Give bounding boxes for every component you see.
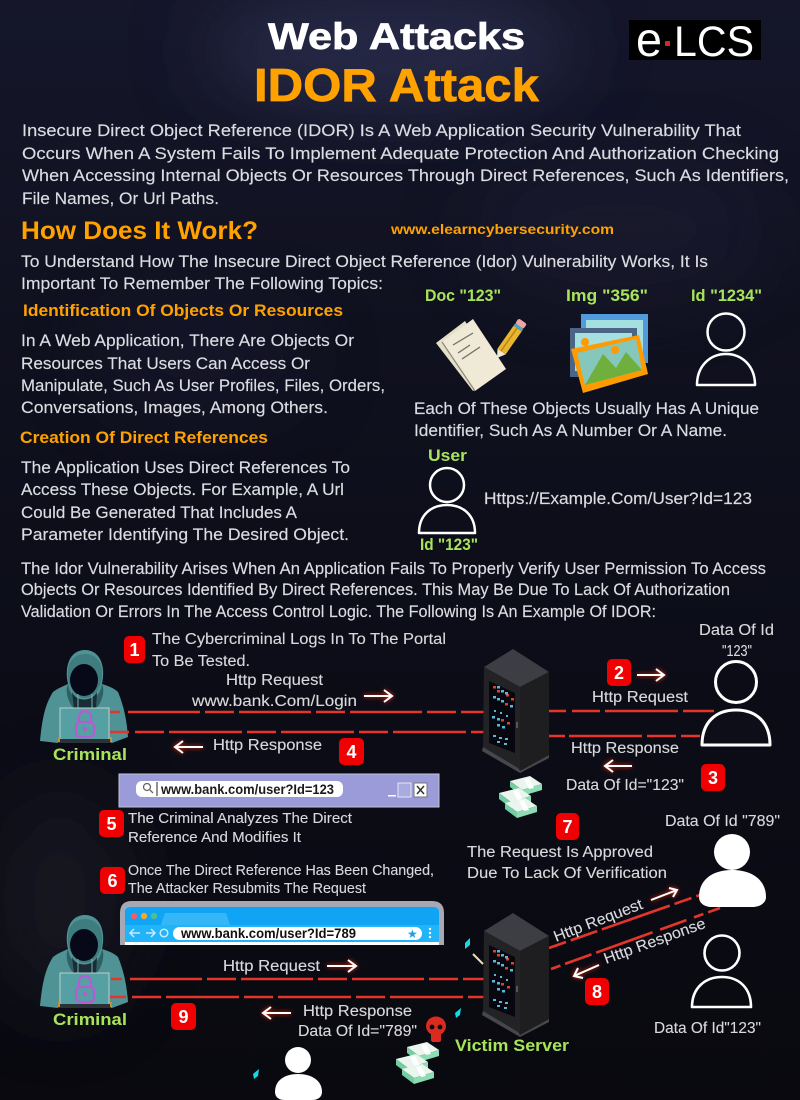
step 9 <box>171 1003 417 1040</box>
diagonal labels and step 8: 8 <box>592 982 602 1002</box>
logo: e-LCS: LCS <box>674 18 754 66</box>
user id 123 top: "123" <box>722 643 752 660</box>
objects description <box>414 399 759 440</box>
creation text: Could Be Generated That Includes A <box>21 503 298 522</box>
step 7: The Request Is Approved <box>467 844 653 861</box>
creation text: The Application Uses Direct References To <box>21 458 350 477</box>
creation text: Parameter Identifying The Desired Object. <box>21 525 349 544</box>
browser bar: modified url <box>119 774 439 807</box>
identification text: Resources That Users Can Access Or <box>21 354 310 373</box>
step 6: 6 <box>107 871 118 891</box>
logo: e-LCS <box>629 14 761 67</box>
server top <box>482 649 549 773</box>
step 3: Http Response <box>571 740 679 757</box>
vulnerability paragraph: Objects Or Resources Identified By Direct References. This May Be Due To Lack Of Authorization <box>21 580 730 599</box>
step 4 response: Http Response <box>213 737 322 754</box>
intro text: Occurs When A System Fails To Implement Adequate Protection And Authorization Checking <box>22 144 779 163</box>
step 6: The Attacker Resubmits The Request <box>128 881 366 897</box>
step 9: 9 <box>178 1007 189 1027</box>
title: Web Attacks <box>268 16 525 57</box>
browser window: changed url: www.bank.com/user?Id=789 <box>180 926 356 941</box>
creation text: Access These Objects. For Example, A Url <box>21 480 344 499</box>
vulnerability paragraph: Validation Or Errors In The Access Control Logic. The Following Is An Example Of IDOR: <box>21 602 656 621</box>
step 1: 1 <box>129 640 140 660</box>
identification text: Manipulate, Such As User Profiles, Files, Orders, <box>21 376 385 395</box>
step 6: Once The Direct Reference Has Been Changed, <box>128 863 434 879</box>
victim server: Victim Server <box>455 1036 569 1055</box>
login request label <box>191 672 392 710</box>
criminal top: Criminal <box>53 745 127 764</box>
intro text: Insecure Direct Object Reference (IDOR) Is A Web Application Security Vulnerability That <box>22 121 741 140</box>
step 1 <box>124 631 446 670</box>
step 7: Due To Lack Of Verification <box>467 865 667 882</box>
heading: creation of direct references: Creation Of Direct References <box>20 428 268 447</box>
browser window: changed url <box>120 901 444 945</box>
user reference icon: User <box>428 446 467 465</box>
how it works intro: Important To Remember The Following Topics: <box>21 274 383 293</box>
object: id user: Id "1234" <box>691 286 762 305</box>
step 3: 3 <box>708 768 718 788</box>
diagonal labels and step 8: Http Request <box>551 896 646 946</box>
user id 789: Data Of Id "789" <box>665 813 780 830</box>
how it works intro: To Understand How The Insecure Direct Object Reference (Idor) Vulnerability Works, It Is <box>21 252 708 271</box>
vulnerability paragraph: The Idor Vulnerability Arises When An Application Fails To Properly Verify User Permission To Access <box>21 559 766 578</box>
step 7: 7 <box>562 817 573 837</box>
second request label <box>223 958 356 975</box>
victim server <box>253 913 569 1079</box>
login request label: Http Request <box>226 672 324 689</box>
creation text <box>21 458 350 544</box>
user reference icon: Id "123" <box>420 535 478 554</box>
dashed connection lines <box>128 711 720 997</box>
user id 123 top: Data Of Id <box>699 622 774 639</box>
diagonal labels and step 8: Http Response <box>602 915 708 968</box>
step 4 response <box>175 737 364 765</box>
object: images: Img "356" <box>566 286 648 305</box>
step 5: The Criminal Analyzes The Direct <box>128 811 352 827</box>
attacker user icon bottom <box>275 1047 322 1100</box>
objects description: Identifier, Such As A Number Or A Name. <box>414 421 727 440</box>
vulnerability paragraph <box>21 559 766 621</box>
identification text: In A Web Application, There Are Objects Or <box>21 331 354 350</box>
step 1: The Cybercriminal Logs In To The Portal <box>152 631 446 648</box>
step 3: Data Of Id="123" <box>566 777 684 794</box>
intro text: File Names, Or Url Paths. <box>22 189 219 208</box>
step 3 <box>566 740 725 794</box>
object: images <box>566 286 648 393</box>
object: document <box>425 286 527 391</box>
title: IDOR Attack <box>254 59 539 111</box>
diagonal labels and step 8 <box>551 888 708 1005</box>
money top <box>499 776 542 818</box>
step 1: To Be Tested. <box>152 653 250 670</box>
skull icon <box>426 1016 446 1042</box>
user id 123 bottom <box>654 936 761 1037</box>
criminal top <box>40 650 129 764</box>
step 9: Http Response <box>303 1003 412 1020</box>
website url: www.elearncybersecurity.com <box>390 221 614 237</box>
step 5 <box>99 810 352 846</box>
money bottom <box>396 1042 439 1084</box>
step 5: 5 <box>106 814 117 834</box>
step 4 response: 4 <box>346 742 357 762</box>
heading: identification of objects: Identification Of Objects Or Resources <box>23 301 343 320</box>
step 2: Http Request <box>592 689 689 706</box>
second request label: Http Request <box>223 958 321 975</box>
user id 789 <box>665 813 780 907</box>
logo: e-LCS: e <box>636 14 662 67</box>
user id 123 bottom: Data Of Id"123" <box>654 1020 761 1037</box>
object: document: Doc "123" <box>425 286 501 305</box>
example url: Https://Example.Com/User?Id=123 <box>484 489 752 508</box>
user id 123 top <box>699 622 774 745</box>
how it works intro <box>21 252 708 293</box>
criminal bottom: Criminal <box>53 1010 127 1029</box>
step 6 <box>100 863 434 897</box>
heading: how does it work: How Does It Work? <box>21 217 258 245</box>
login request label: www.bank.Com/Login <box>191 693 357 710</box>
intro text: When Accessing Internal Objects Or Resources Through Direct References, Such As Identifiers, <box>22 166 789 185</box>
step 9: Data Of Id="789" <box>298 1023 417 1040</box>
identification text: Conversations, Images, Among Others. <box>21 398 328 417</box>
objects description: Each Of These Objects Usually Has A Unique <box>414 399 759 418</box>
step 2: 2 <box>614 663 624 683</box>
intro text <box>22 121 789 208</box>
step 2 <box>592 659 689 706</box>
title <box>254 16 539 111</box>
identification text <box>21 331 385 417</box>
user reference icon <box>419 446 478 554</box>
browser window: changed url: ★ <box>407 927 418 941</box>
object: id user <box>691 286 762 385</box>
criminal bottom <box>40 915 128 1029</box>
step 7 <box>467 813 667 882</box>
browser bar: modified url: www.bank.com/user?Id=123 <box>160 782 334 797</box>
step 5: Reference And Modifies It <box>128 830 301 846</box>
